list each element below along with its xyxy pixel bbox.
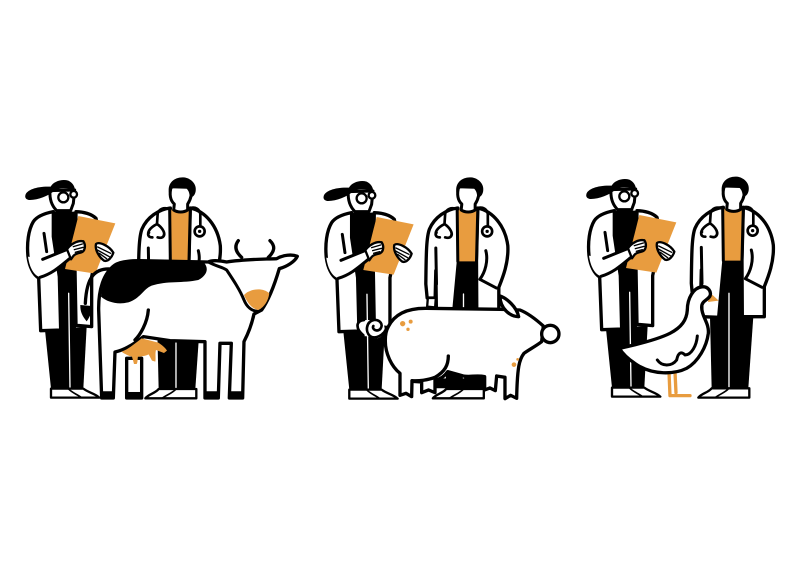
pig (357, 296, 559, 399)
vet with clipboard (586, 179, 676, 397)
vet with stethoscope (691, 177, 773, 398)
panel: vets with goose (586, 177, 773, 398)
vet with stethoscope (426, 177, 508, 398)
vet with clipboard (324, 181, 414, 399)
vet with stethoscope (138, 177, 220, 398)
panel: vets with pig (324, 177, 559, 399)
goose (619, 287, 719, 396)
panel: vets with cow (25, 177, 297, 398)
vet with clipboard (25, 180, 115, 398)
cow (80, 241, 297, 398)
